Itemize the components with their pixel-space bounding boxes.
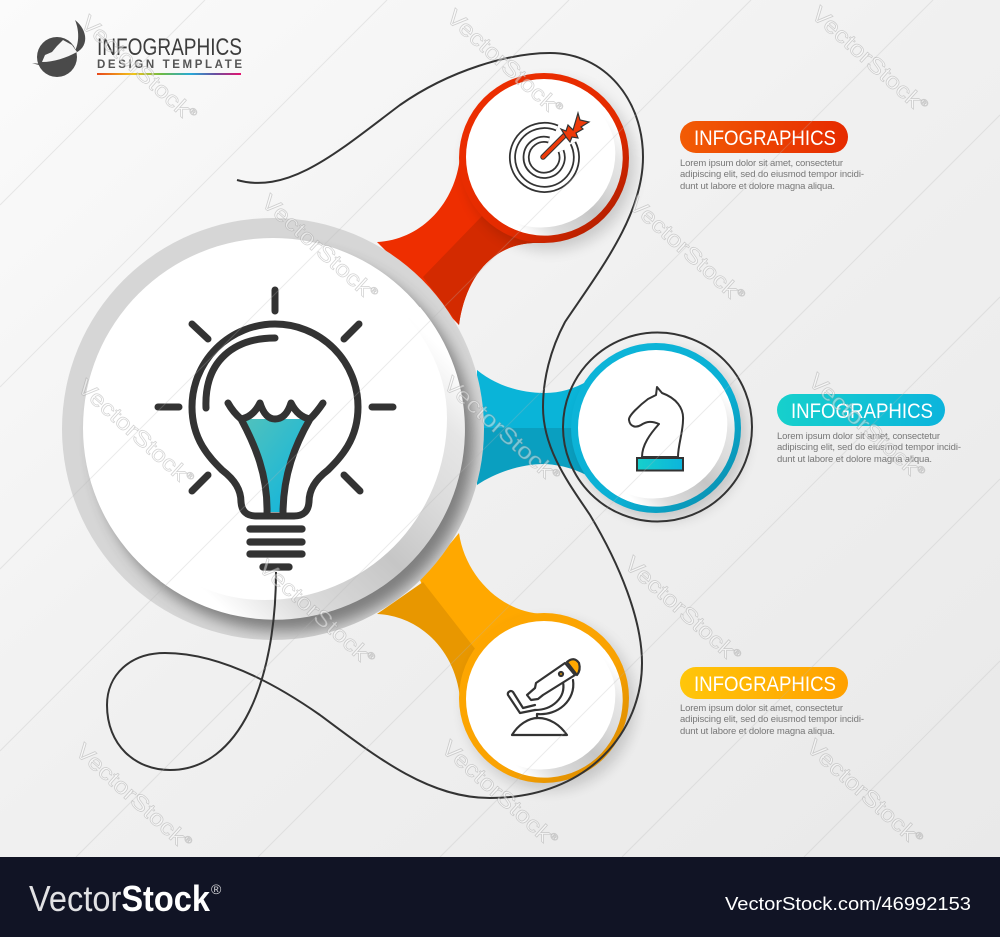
rays bbox=[158, 290, 393, 491]
connector: red bbox=[377, 157, 545, 325]
watermark text: ® bbox=[184, 469, 197, 482]
icon: target with arrow bbox=[512, 113, 589, 189]
watermark text: ® bbox=[731, 646, 744, 659]
watermark text: VectorStock bbox=[439, 371, 543, 468]
icon: light bulb bbox=[158, 290, 393, 567]
watermark text: VectorStock bbox=[804, 368, 908, 465]
body text bbox=[680, 703, 864, 737]
watermark text: ® bbox=[918, 96, 931, 109]
watermark text: ® bbox=[548, 830, 561, 843]
glass highlight bbox=[206, 338, 275, 408]
watermark text: VectorStock bbox=[802, 734, 906, 831]
watermark text: VectorStock bbox=[620, 551, 724, 648]
logo subtitle: DESIGN TEMPLATE bbox=[97, 59, 242, 71]
body text: Lorem ipsum dolor sit amet, consectetur bbox=[777, 431, 940, 442]
wire curve bbox=[107, 53, 643, 798]
watermark text: ® bbox=[368, 284, 381, 297]
watermark text: ® bbox=[187, 105, 200, 118]
watermark text: VectorStock bbox=[254, 554, 358, 651]
watermark text: ® bbox=[913, 829, 926, 842]
watermark text: ® bbox=[182, 833, 195, 846]
watermark text: ® bbox=[915, 463, 928, 476]
connector: orange bbox=[377, 533, 543, 700]
shadow bbox=[465, 80, 635, 250]
panel: item 2 text bbox=[777, 394, 961, 465]
watermark text: ® bbox=[365, 649, 378, 662]
footer url: VectorStock.com/46992153 bbox=[725, 893, 971, 914]
watermark text: VectorStock bbox=[76, 10, 180, 107]
watermark text: VectorStock bbox=[437, 735, 541, 832]
watermark text: VectorStock bbox=[73, 374, 177, 471]
panel: item 3 text bbox=[680, 667, 864, 737]
body text: adipiscing elit, sed do eiusmod tempor incidi- bbox=[680, 169, 864, 180]
pill heading bbox=[680, 121, 848, 153]
watermark text: ® bbox=[553, 99, 566, 112]
bulb glass bbox=[192, 324, 358, 516]
pill heading: INFOGRAPHICS bbox=[791, 400, 933, 423]
body text: Lorem ipsum dolor sit amet, consectetur bbox=[680, 703, 843, 714]
icon: microscope bbox=[508, 659, 580, 735]
node: blue bbox=[571, 343, 747, 520]
pill heading: INFOGRAPHICS bbox=[694, 673, 836, 696]
registered mark: ® bbox=[211, 881, 222, 897]
panel: main circle bbox=[62, 218, 484, 640]
watermark text bbox=[71, 1, 933, 855]
logo icon bbox=[32, 20, 85, 77]
shadow bbox=[577, 350, 747, 520]
logo title: INFOGRAPHICS bbox=[97, 34, 242, 61]
watermark text: ® bbox=[735, 286, 748, 299]
watermark text: VectorStock bbox=[807, 1, 911, 98]
watermark text: VectorStock bbox=[442, 4, 546, 101]
body text: adipiscing elit, sed do eiusmod tempor incidi- bbox=[777, 442, 961, 453]
filament bbox=[228, 403, 323, 514]
body text: dunt ut labore et dolore magna aliqua. bbox=[680, 181, 835, 192]
body text: Lorem ipsum dolor sit amet, consectetur bbox=[680, 158, 843, 169]
pill heading bbox=[680, 667, 848, 699]
body text: dunt ut labore et dolore magna aliqua. bbox=[777, 454, 932, 465]
watermark text: ® bbox=[550, 466, 563, 479]
pill heading: INFOGRAPHICS bbox=[694, 127, 836, 150]
footer bar bbox=[0, 857, 1000, 937]
panel: item 1 text bbox=[680, 121, 864, 192]
icon: chess knight bbox=[629, 387, 683, 470]
body text: dunt ut labore et dolore magna aliqua. bbox=[680, 726, 835, 737]
footer logo: VectorStock bbox=[29, 878, 211, 919]
filament fill bbox=[241, 419, 310, 512]
pill heading bbox=[777, 394, 945, 426]
logo rainbow rule bbox=[97, 73, 241, 75]
base threads bbox=[250, 529, 302, 567]
connector: blue bbox=[477, 370, 600, 485]
node: red bbox=[459, 73, 635, 250]
watermark text: VectorStock bbox=[624, 191, 728, 288]
shadow bbox=[465, 620, 635, 790]
logo bbox=[32, 20, 242, 77]
node: orange bbox=[459, 613, 635, 790]
watermark text: VectorStock bbox=[71, 738, 175, 835]
body text: adipiscing elit, sed do eiusmod tempor incidi- bbox=[680, 714, 864, 725]
black ring around blue node bbox=[563, 332, 752, 522]
body text bbox=[777, 431, 961, 465]
watermark text: VectorStock bbox=[257, 189, 361, 286]
body text bbox=[680, 158, 864, 192]
